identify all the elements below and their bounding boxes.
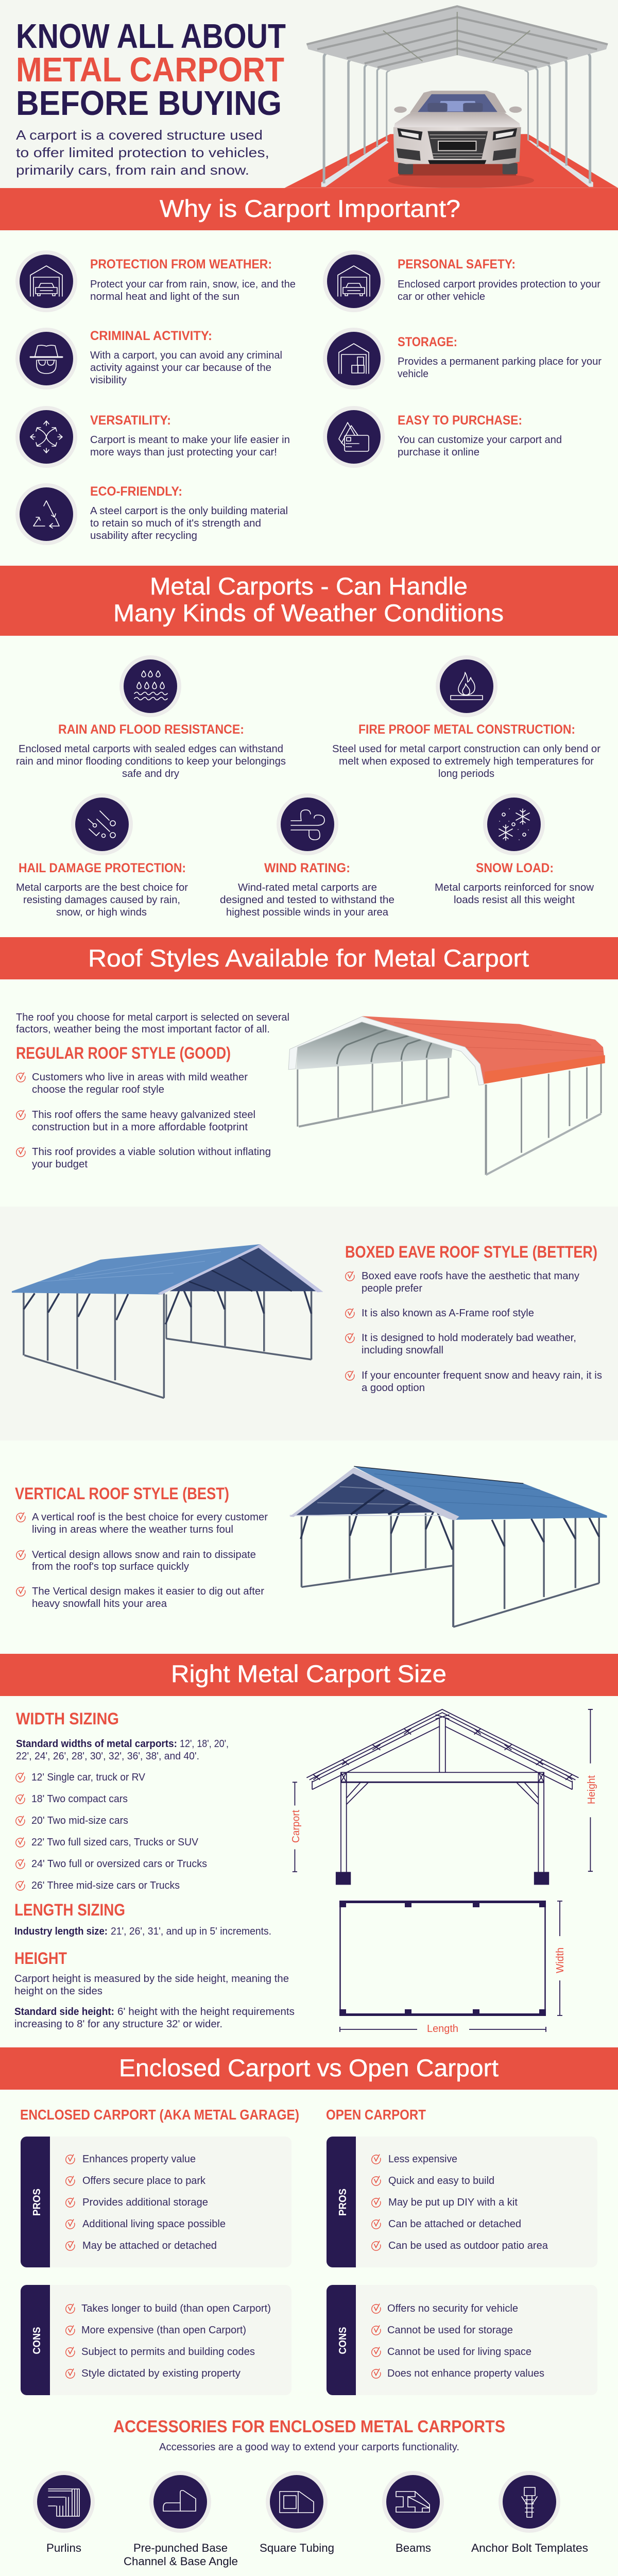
accessory: base channel: Pre-punched Base — [133, 2541, 228, 2554]
bullet: 22' Two full sized cars, Trucks or SUV — [31, 1837, 199, 1848]
bullet: from the roof's top surface quickly — [32, 1561, 189, 1572]
reason: criminal activity: visibility — [90, 375, 127, 386]
icon: garage with car — [15, 250, 77, 312]
panel: weather features — [16, 655, 600, 918]
feature: fire proof: Steel used for metal carport construction can only bend or — [332, 743, 600, 755]
bullet: 18' Two compact cars — [31, 1793, 128, 1805]
reason: protection from weather: normal heat and light of the sun — [90, 291, 239, 302]
label: pros: PROS — [31, 2189, 43, 2216]
feature: wind rating — [220, 793, 394, 918]
heading: width sizing: WIDTH SIZING — [16, 1709, 119, 1728]
bullet — [16, 1512, 268, 1535]
bullet — [346, 1270, 579, 1294]
roof intro text — [16, 1012, 289, 1035]
reason: criminal activity: CRIMINAL ACTIVITY: — [90, 329, 212, 343]
feature: fire proof: melt when exposed to extremely high temperatures for — [339, 756, 594, 767]
bullet — [16, 1072, 248, 1095]
panel: hero — [0, 0, 618, 188]
item: Offers secure place to park — [82, 2175, 206, 2187]
feature: snow load: loads resist all this weight — [454, 894, 575, 906]
item: Cannot be used for living space — [387, 2346, 531, 2358]
reason: personal safety: PERSONAL SAFETY: — [398, 257, 516, 272]
bullet: 12' Single car, truck or RV — [31, 1772, 146, 1783]
feature: hail damage protection: snow, or high winds — [56, 907, 147, 918]
reason: criminal activity: activity against your car because of the — [90, 362, 271, 374]
feature: hail damage protection — [16, 793, 188, 918]
icon: wind — [277, 793, 338, 855]
reason: eco-friendly: usability after recycling — [90, 530, 197, 541]
text: standard widths: Standard widths of metal carports: — [16, 1738, 177, 1750]
item: Can be attached or detached — [388, 2218, 521, 2230]
label: pros: PROS — [337, 2189, 349, 2216]
heading: regular roof style: REGULAR ROOF STYLE (GOOD) — [16, 1044, 231, 1062]
bullet: It is also known as A-Frame roof style — [362, 1308, 534, 1319]
section banner: enclosed vs open: Enclosed Carport vs Open Carport — [119, 2054, 499, 2081]
feature: rain and flood resistance — [16, 655, 286, 779]
reason: personal safety — [323, 250, 600, 312]
bullet: 24' Two full or oversized cars or Trucks — [31, 1858, 207, 1870]
text: standard widths: 12', 18', 20', — [180, 1738, 229, 1750]
feature: snow load: SNOW LOAD: — [476, 861, 554, 875]
panel: vertical roof style — [15, 1466, 607, 1627]
bullet: construction but in a more affordable footprint — [32, 1122, 248, 1133]
intro paragraph: A carport is a covered structure used — [16, 127, 263, 143]
accessory: base channel: Channel & Base Angle — [124, 2555, 238, 2568]
bullet: 20' Two mid-size cars — [31, 1815, 128, 1826]
section banner: enclosed vs open — [0, 2047, 618, 2090]
reason: storage: STORAGE: — [398, 335, 457, 349]
reason: easy to purchase: You can customize your carport and — [398, 434, 562, 446]
feature: snow load — [435, 793, 594, 906]
bullet — [346, 1370, 602, 1394]
panel: enclosed pros — [21, 2137, 291, 2267]
reason: storage: vehicle — [398, 368, 428, 380]
label: cons: CONS — [337, 2327, 349, 2354]
bullet: Customers who live in areas with mild weather — [32, 1072, 248, 1083]
heading: accessories: ACCESSORIES FOR ENCLOSED METAL CARPORTS — [113, 2417, 505, 2436]
text: standard widths: 22', 24', 26', 28', 30', 32', 36', 38', and 40'. — [16, 1751, 199, 1762]
icon: storage garage — [323, 328, 385, 389]
icon: credit card — [323, 406, 385, 468]
feature: wind rating: WIND RATING: — [264, 861, 350, 875]
accessory: square tubing: Square Tubing — [260, 2541, 334, 2554]
panel: open cons — [327, 2285, 597, 2395]
icon: base angle — [149, 2471, 211, 2533]
panel: regular roof style — [16, 1012, 605, 1175]
section banner: right size — [0, 1654, 618, 1696]
bullet: Boxed eave roofs have the aesthetic that many — [362, 1270, 579, 1282]
feature: wind rating: designed and tested to withstand the — [220, 894, 394, 906]
section banner: weather conditions — [0, 566, 618, 636]
accessory: square tubing — [260, 2471, 334, 2554]
label: height: Height — [586, 1775, 597, 1804]
bullet: including snowfall — [362, 1345, 443, 1356]
roof intro text: factors, weather being the most important factor of all. — [16, 1024, 270, 1035]
bullet: choose the regular roof style — [32, 1084, 164, 1095]
title: BEFORE BUYING — [16, 84, 282, 123]
item: Style dictated by existing property — [81, 2368, 241, 2379]
item: Quick and easy to build — [388, 2175, 494, 2187]
section banner: weather conditions: Many Kinds of Weather Conditions — [113, 599, 504, 626]
text: standard widths — [16, 1738, 229, 1762]
bullet: The Vertical design makes it easier to dig out after — [32, 1586, 264, 1597]
item: Subject to permits and building codes — [81, 2346, 255, 2358]
reason: easy to purchase: purchase it online — [398, 447, 479, 458]
feature: rain and flood resistance: RAIN AND FLOOD RESISTANCE: — [58, 722, 244, 737]
icon: multi-directional arrows — [15, 406, 77, 468]
bullet — [346, 1332, 576, 1356]
text: accessories intro: Accessories are a good way to extend your carports functionality. — [159, 2442, 459, 2453]
icon: recycle triangle — [15, 483, 77, 545]
icon: anchor bolt — [499, 2471, 560, 2533]
reason: protection from weather: PROTECTION FROM WEATHER: — [90, 257, 272, 272]
heading: enclosed carport: ENCLOSED CARPORT (AKA METAL GARAGE) — [20, 2107, 299, 2123]
reason: protection from weather — [15, 250, 296, 312]
reason: eco-friendly: ECO-FRIENDLY: — [90, 484, 182, 499]
accessory: base channel — [124, 2471, 238, 2568]
feature: snow load: Metal carports reinforced for snow — [435, 882, 594, 893]
panel: boxed eave roof style — [0, 1207, 618, 1440]
icon: snowflakes — [483, 793, 545, 855]
text: standard side height — [14, 2006, 295, 2030]
accessory: beams — [382, 2471, 444, 2554]
title — [16, 17, 286, 123]
bullet — [16, 1109, 255, 1133]
feature: hail damage protection: HAIL DAMAGE PROTECTION: — [19, 861, 186, 875]
accessory: purlins: Purlins — [46, 2541, 81, 2554]
bullet — [16, 1586, 264, 1609]
intro paragraph — [16, 127, 269, 178]
item: Does not enhance property values — [387, 2368, 544, 2379]
icon: square tube — [266, 2471, 328, 2533]
text: industry length — [14, 1926, 271, 1937]
diagram: truss front view — [290, 1709, 597, 1884]
label: width: Width — [555, 1947, 566, 1973]
reason: versatility: VERSATILITY: — [90, 413, 171, 428]
feature: rain and flood resistance: safe and dry — [122, 768, 179, 779]
bullet: If your encounter frequent snow and heavy rain, it is — [362, 1370, 602, 1381]
diagram: plan view — [339, 1901, 566, 2035]
bullet: people prefer — [362, 1283, 422, 1294]
image: blue vertical roof carport — [289, 1466, 607, 1627]
intro paragraph: to offer limited protection to vehicles, — [16, 145, 269, 160]
text: height measure: Carport height is measured by the side height, meaning the — [14, 1973, 289, 1985]
reason: versatility: more ways than just protecting your car! — [90, 447, 277, 458]
reason: personal safety: Enclosed carport provides protection to your — [398, 279, 600, 290]
text: industry length: Industry length size: — [14, 1926, 108, 1937]
illustration: carport with car — [285, 6, 618, 188]
reason: criminal activity — [15, 328, 282, 389]
icon: disguised person — [15, 328, 77, 389]
heading: height: HEIGHT — [14, 1949, 67, 1968]
heading: vertical roof: VERTICAL ROOF STYLE (BEST) — [15, 1484, 229, 1503]
feature: rain and flood resistance: Enclosed metal carports with sealed edges can withstand — [19, 743, 283, 755]
title: METAL CARPORT — [16, 50, 284, 89]
text: standard side height: increasing to 8' for any structure 32' or wider. — [14, 2019, 222, 2030]
feature: fire proof: FIRE PROOF METAL CONSTRUCTION: — [358, 722, 575, 737]
bullet: Vertical design allows snow and rain to dissipate — [32, 1549, 256, 1561]
panel: enclosed cons — [21, 2285, 291, 2395]
text: height measure — [14, 1973, 289, 1997]
reason: eco-friendly: A steel carport is the only building material — [90, 505, 288, 517]
section banner: why is carport important: Why is Carport Important? — [160, 195, 460, 222]
icon: hail — [71, 793, 133, 855]
panel: sizing text — [14, 1709, 295, 2030]
item: May be attached or detached — [82, 2240, 217, 2251]
icon: garage with car — [323, 250, 385, 312]
bullet: living in areas where the weather turns foul — [32, 1524, 233, 1535]
feature: hail damage protection: Metal carports are the best choice for — [16, 882, 188, 893]
panel: reasons — [15, 250, 602, 545]
accessory: purlins — [33, 2471, 95, 2554]
heading: open carport: OPEN CARPORT — [326, 2107, 426, 2123]
reason: eco-friendly — [15, 483, 288, 545]
accessory: beams: Beams — [396, 2541, 431, 2554]
section banner: roof styles: Roof Styles Available for Metal Carport — [88, 944, 529, 972]
text: height measure: height on the sides — [14, 1986, 102, 1997]
feature: fire proof — [332, 655, 600, 779]
image: blue boxed eave carport — [12, 1244, 323, 1398]
item: Takes longer to build (than open Carport) — [81, 2303, 271, 2314]
reason: personal safety: car or other vehicle — [398, 291, 485, 302]
reason: storage — [323, 328, 602, 389]
bullet: heavy snowfall hits your area — [32, 1598, 167, 1609]
intro paragraph: primarily cars, from rain and snow. — [16, 162, 249, 178]
reason: versatility — [15, 406, 290, 468]
item: Can be used as outdoor patio area — [388, 2240, 548, 2251]
section banner: weather conditions: Metal Carports - Can Handle — [150, 572, 468, 600]
item: More expensive (than open Carport) — [81, 2325, 246, 2336]
bullet: a good option — [362, 1382, 425, 1394]
item: May be put up DIY with a kit — [388, 2197, 518, 2208]
label: cons: CONS — [31, 2327, 43, 2354]
feature: wind rating: highest possible winds in your area — [226, 907, 389, 918]
item: Additional living space possible — [82, 2218, 226, 2230]
text: standard side height: 6' height with the height requirements — [117, 2006, 295, 2018]
item: Less expensive — [388, 2154, 457, 2165]
bullet — [16, 1146, 271, 1170]
item: Enhances property value — [82, 2154, 196, 2165]
section banner: right size: Right Metal Carport Size — [171, 1660, 447, 1687]
panel: open pros — [327, 2137, 597, 2267]
bullet: your budget — [32, 1159, 88, 1170]
reason: versatility: Carport is meant to make your life easier in — [90, 434, 290, 446]
feature: rain and flood resistance: rain and minor flooding conditions to keep your belongings — [16, 756, 286, 767]
roof intro text: The roof you choose for metal carport is selected on several — [16, 1012, 289, 1023]
image: red regular roof carport — [288, 1016, 605, 1175]
item: Offers no security for vehicle — [387, 2303, 518, 2314]
text: industry length: 21', 26', 31', and up in 5' increments. — [111, 1926, 271, 1937]
feature: wind rating: Wind-rated metal carports are — [238, 882, 377, 893]
title: KNOW ALL ABOUT — [16, 17, 286, 56]
icon: i-beam — [382, 2471, 444, 2533]
bullet: This roof offers the same heavy galvanized steel — [32, 1109, 255, 1121]
label: carport: Carport — [290, 1810, 302, 1843]
reason: easy to purchase — [323, 406, 562, 468]
reason: criminal activity: With a carport, you can avoid any criminal — [90, 350, 282, 361]
panel: accessories grid — [30, 2471, 588, 2576]
bullet: This roof provides a viable solution without inflating — [32, 1146, 271, 1158]
icon: rain drops and water — [119, 655, 181, 717]
reason: storage: Provides a permanent parking place for your — [398, 356, 602, 367]
icon: flame — [436, 655, 497, 717]
item: Provides additional storage — [82, 2197, 208, 2208]
reason: easy to purchase: EASY TO PURCHASE: — [398, 413, 522, 428]
section banner: why is carport important — [0, 188, 618, 230]
reason: protection from weather: Protect your car from rain, snow, ice, and the — [90, 279, 296, 290]
text: standard side height: Standard side height: — [14, 2006, 114, 2018]
feature: hail damage protection: resisting damages caused by rain, — [23, 894, 180, 906]
section banner: roof styles — [0, 937, 618, 979]
label: length: Length — [427, 2023, 458, 2035]
reason: eco-friendly: to retain so much of it's strength and — [90, 518, 261, 529]
heading: length sizing: LENGTH SIZING — [14, 1901, 125, 1919]
item: Cannot be used for storage — [387, 2325, 513, 2336]
bullet — [16, 1549, 256, 1572]
bullet: A vertical roof is the best choice for every customer — [32, 1512, 268, 1523]
accessory: anchor bolt templates — [471, 2471, 588, 2554]
icon: purlins — [33, 2471, 95, 2533]
feature: fire proof: long periods — [438, 768, 494, 779]
accessory: anchor bolt templates: Anchor Bolt Templates — [471, 2541, 588, 2554]
bullet: 26' Three mid-size cars or Trucks — [31, 1880, 180, 1891]
bullet: It is designed to hold moderately bad weather, — [362, 1332, 576, 1344]
